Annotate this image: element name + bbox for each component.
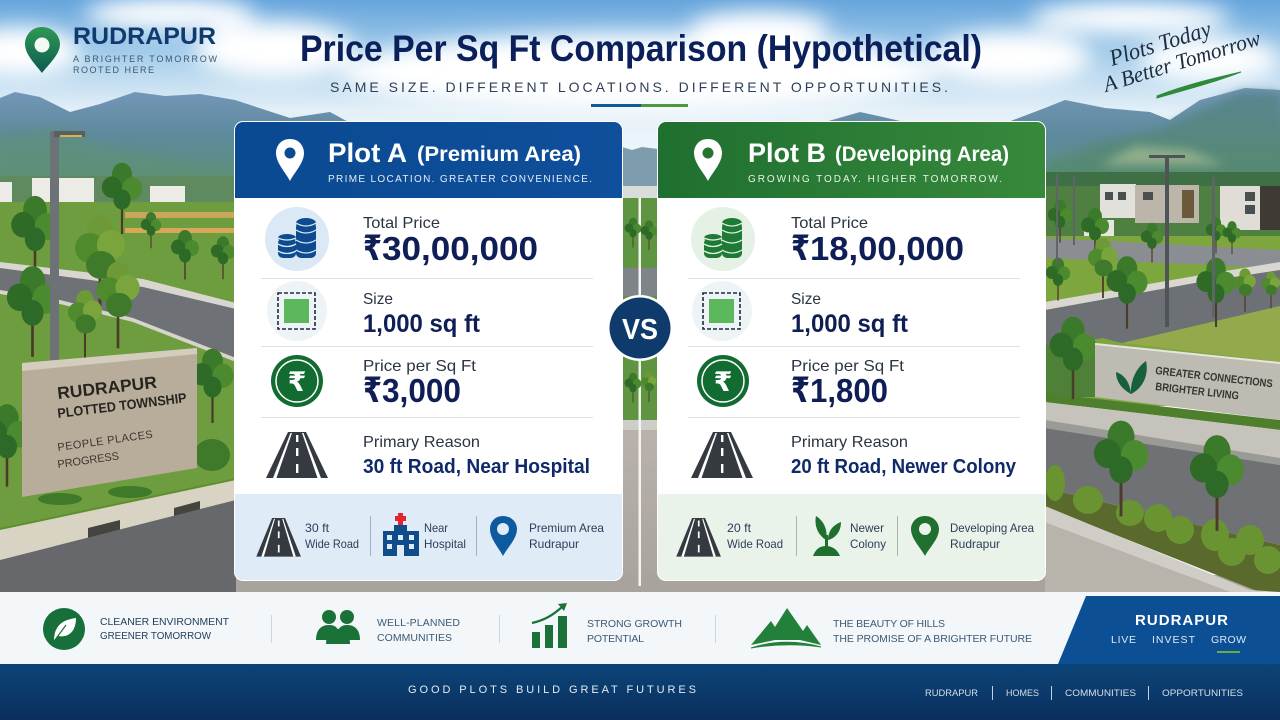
icon: road [691,432,753,478]
feature: premium area: Rudrapur [529,537,579,551]
benefit: beauty of hills [751,608,1032,648]
benefit: strong growth potential [532,603,682,648]
row: primary reason: Primary Reason [791,434,908,451]
feature: premium area [490,516,604,556]
feature: wide road [676,518,783,557]
brand corner: Rudrapur live invest grow [1058,596,1280,664]
brand corner: Rudrapur live invest grow: LIVE [1111,634,1136,646]
brand corner: Rudrapur live invest grow: RUDRAPUR [1135,612,1228,629]
value: price per sq ft: ₹ [363,371,382,410]
feature: developing area [911,516,1034,556]
value: total price: ₹ [791,229,810,268]
right lawn [1122,306,1280,362]
feature: near hospital: Hospital [424,537,466,551]
benefit: cleaner environment: CLEANER ENVIRONMENT [100,616,230,628]
value: total price: 18,00,000 [810,230,964,267]
row: size: Size [363,291,393,308]
header band [658,122,1045,198]
right kerb [1045,506,1280,600]
row: price per sq ft: Price per Sq Ft [791,358,905,375]
right sidewalk and road 2 [1045,262,1280,312]
icon: rupee: ₹ [714,367,732,397]
right road 1 [1045,238,1280,268]
feature: newer colony [813,516,886,556]
entrance sign: Greater Connections [1095,343,1280,420]
icon: rupee [271,355,323,407]
title underline [591,104,688,107]
left lower grass, kerb, road [0,478,236,535]
background: mountains [0,88,1280,190]
row: size [267,281,481,341]
benefit: beauty of hills: THE BEAUTY OF HILLS [833,618,945,630]
row: price per sq ft [697,355,905,410]
row: primary reason: 30 ft Road, Near Hospital [363,456,590,478]
icon: plot square [692,281,752,341]
row: size [692,281,909,341]
right town buildings [1045,172,1280,186]
feature: newer colony: Colony [850,537,886,551]
entrance sign: Rudrapur Plotted Township: PLOTTED TOWNSHIP [57,390,187,421]
background: trees and lamp posts [0,131,1280,574]
icon: plot square [267,281,327,341]
ground base [0,176,236,546]
value: price per sq ft: 1,800 [810,372,888,409]
brand corner: Rudrapur live invest grow: INVEST [1152,634,1196,646]
icon: road [266,432,328,478]
right paving [1045,522,1235,594]
header band [235,122,622,198]
handwritten slogan: A Better Tomorrow [1098,25,1264,97]
row: price per sq ft [271,355,477,410]
row: total price: Total Price [363,215,440,232]
left road and sidewalk [0,262,236,310]
feature: near hospital [383,513,466,556]
footer bar [0,664,1280,720]
title: Price Per Sq Ft Comparison (Hypothetical) [300,28,982,69]
value: total price: ₹ [363,229,382,268]
footer links: COMMUNITIES [1065,688,1136,699]
icon: hospital [383,513,419,556]
panel: Plot B [658,122,1045,580]
benefit: strong growth potential: POTENTIAL [587,633,644,645]
right hedge bed [1045,488,1280,600]
value: total price: 30,00,000 [382,230,538,267]
logo: Rudrapur: ROOTED HERE [73,65,154,75]
panel: Plot A [235,122,622,580]
heading: Plot A: (Premium Area) [417,143,581,166]
benefit: well-planned communities [316,610,460,644]
VS badge [607,295,673,361]
row: primary reason [691,432,1017,478]
logo: Rudrapur [25,23,218,75]
row: total price [691,207,964,271]
card background [658,122,1045,580]
row: primary reason [266,432,590,478]
heading: Plot B [748,138,1009,185]
feature: developing area: Developing Area [950,521,1034,535]
footer links [925,686,1243,700]
footer band [235,494,622,580]
handwritten slogan: Plots Today [1105,16,1215,71]
subtitle: SAME SIZE. DIFFERENT LOCATIONS. DIFFERENT OPPORTUNITIES. [330,79,948,95]
centre light pole [638,198,641,586]
heading: Plot A [328,138,592,185]
row: size: 1,000 sq ft [791,310,909,338]
feature: developing area: Rudrapur [950,537,1000,551]
value: price per sq ft: 3,000 [382,372,461,409]
row: primary reason: 20 ft Road, Newer Colony [791,456,1017,478]
benefits strip [0,592,1280,664]
benefit: cleaner environment: GREENER TOMORROW [100,630,211,642]
feature: near hospital: Near [424,521,448,535]
heading: Plot B: GROWING TODAY. HIGHER TOMORROW. [748,174,1002,185]
feature: premium area: Premium Area [529,521,604,535]
entrance sign: Rudrapur Plotted Township: PROGRESS [57,450,120,471]
heading: Plot A: Plot A [328,138,407,168]
footer tagline: GOOD PLOTS BUILD GREAT FUTURES [408,684,696,696]
VS badge: VS [622,314,658,346]
icon: logo pin [25,27,60,73]
benefit: well-planned communities: COMMUNITIES [377,632,452,644]
feature: wide road: Wide Road [305,537,359,551]
footer links: RUDRAPUR [925,688,978,699]
heading: Plot A: PRIME LOCATION. GREATER CONVENIENCE. [328,174,592,185]
entrance sign: Rudrapur Plotted Township [22,348,197,497]
icon: coins [265,207,329,271]
icon: header pin [694,139,722,181]
value: price per sq ft: ₹ [791,371,810,410]
icon: coins [691,207,755,271]
row: size: Size [791,291,821,308]
brand corner: Rudrapur live invest grow: GROW [1211,634,1246,646]
heading: Plot B: Plot B [748,138,826,168]
row: total price [265,207,538,271]
icon: rupee: ₹ [288,367,306,397]
footer links: HOMES [1006,688,1039,699]
background: township ground, roads and paving [0,172,1280,600]
benefit: cleaner environment [43,608,230,650]
entrance sign: Rudrapur Plotted Township: RUDRAPUR [56,373,158,403]
centre column details [622,186,658,198]
row: price per sq ft: Price per Sq Ft [363,358,477,375]
logo: Rudrapur: RUDRAPUR [73,23,216,50]
heading: Plot B: (Developing Area) [835,143,1009,166]
feature: wide road: 20 ft [727,521,752,535]
icon: sprout [813,516,841,556]
bottom paving under cards [236,575,1276,595]
feature: wide road: Wide Road [727,537,783,551]
feature: wide road: 30 ft [305,521,330,535]
background: sky with clouds [0,0,1280,180]
benefit: well-planned communities: WELL-PLANNED [377,617,460,629]
row: primary reason: Primary Reason [363,434,480,451]
logo: Rudrapur: A BRIGHTER TOMORROW [73,54,218,64]
footer links: OPPORTUNITIES [1162,688,1243,699]
card background [235,122,622,580]
row: size: 1,000 sq ft [363,310,481,338]
icon: rupee [697,355,749,407]
feature: newer colony: Newer [850,521,884,535]
icon: header pin [276,139,304,181]
right lower band [1045,345,1095,397]
entrance sign: Greater Connections: BRIGHTER LIVING [1155,381,1239,402]
entrance sign: Rudrapur Plotted Township: PEOPLE PLACES [57,429,153,454]
feature: wide road [256,518,359,557]
left town [0,176,236,202]
benefit: beauty of hills: THE PROMISE OF A BRIGHTER FUTURE [833,633,1032,645]
footer band [658,494,1045,580]
benefit: strong growth potential: STRONG GROWTH [587,618,682,630]
row: total price: Total Price [791,215,868,232]
